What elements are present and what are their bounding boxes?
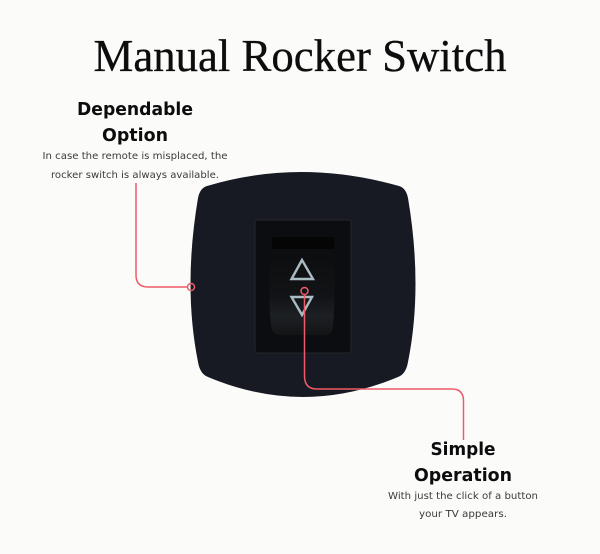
text block: In case the remote is misplaced, the	[42, 151, 228, 162]
callout: dependable option	[42, 99, 228, 181]
text block: With just the click of a button	[388, 491, 538, 502]
arrow: dependable option leader	[136, 183, 194, 290]
callout: simple operation	[388, 439, 538, 520]
icon: mounting plate	[190, 172, 416, 397]
rocker switch device	[190, 172, 416, 397]
icon: up arrow	[292, 260, 313, 279]
arrow: simple operation leader	[301, 288, 464, 440]
heading: Simple	[430, 439, 496, 460]
callout: dependable option: rocker switch is always available.	[51, 170, 219, 181]
callout: simple operation: your TV appears.	[419, 509, 507, 520]
callout: dependable option: Option	[102, 125, 168, 146]
icon: switch frame	[255, 220, 351, 353]
icon: down arrow	[292, 297, 312, 315]
heading: Dependable	[77, 99, 193, 120]
callout: simple operation: Operation	[414, 465, 512, 486]
icon: rocker	[269, 237, 335, 335]
title: Manual Rocker Switch	[94, 30, 506, 81]
